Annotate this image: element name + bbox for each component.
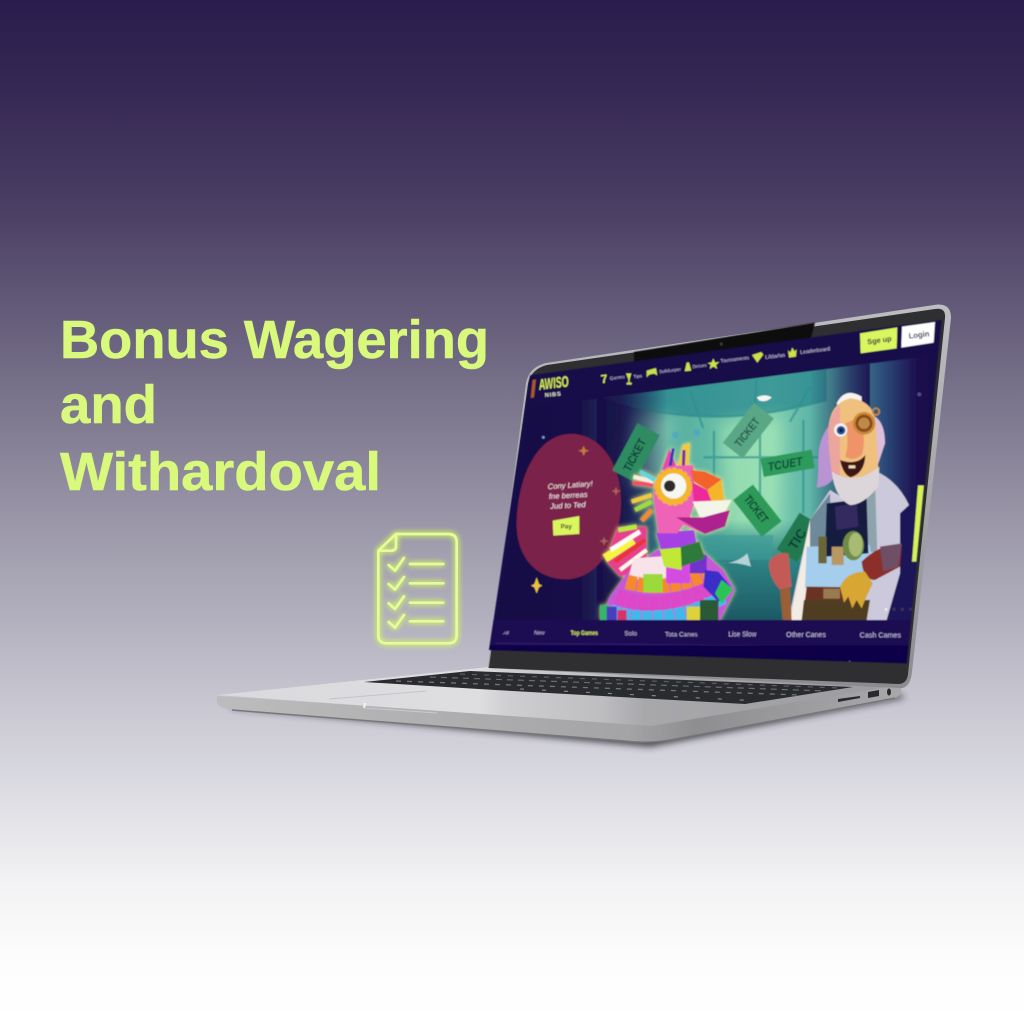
nav items: 7: [600, 372, 609, 386]
promo text: [547, 479, 594, 511]
trackpad edge: [329, 691, 426, 699]
side tab: [912, 485, 925, 562]
lab window frames: [603, 380, 827, 513]
eye petals: [655, 469, 691, 505]
nav items: Tournaments: [720, 355, 750, 365]
promo blob: [517, 434, 621, 579]
right edge fade: [812, 362, 870, 512]
beard: [832, 467, 879, 505]
scientist: [769, 393, 922, 620]
mouth: [840, 455, 865, 477]
lower page strip: Lavet wins: [826, 661, 858, 668]
floating tickets: TICKET: [741, 492, 772, 526]
lab dome: [606, 368, 827, 416]
game category tabs: Lise Slow: [728, 632, 757, 639]
green haze: [607, 413, 783, 533]
body fringe rows: [610, 573, 723, 618]
nav items: [600, 346, 831, 386]
base front edge: [217, 684, 901, 742]
laptop lid rim: [488, 305, 951, 688]
laptop: [217, 305, 951, 747]
sign up button: [860, 327, 897, 353]
ports: sd slot, usb-c, jack: [838, 688, 891, 702]
game category tabs: Tota Canes: [665, 631, 698, 638]
play button: [553, 516, 579, 536]
nav items: Lifdarlas: [765, 353, 786, 361]
laptop ground shadow: [232, 694, 905, 747]
login button: [901, 322, 935, 348]
eye and monocle: [834, 423, 847, 437]
face: [828, 398, 878, 487]
logo: AWISO: [537, 373, 570, 394]
game category tabs: Solo: [624, 630, 637, 637]
teeth: [693, 500, 732, 517]
keyboard: [364, 671, 853, 704]
llama pinata: [600, 443, 735, 620]
left edge fade: [596, 390, 664, 621]
lower page strip: [487, 645, 920, 668]
floating tickets: TICKET: [733, 416, 763, 450]
nav items: Tips: [633, 373, 643, 379]
body patches: [600, 555, 733, 620]
sparkles: [531, 392, 921, 593]
nav bar: [530, 321, 940, 399]
ears: [662, 443, 690, 470]
mane: [632, 472, 655, 521]
floating tickets: TICKET: [620, 436, 649, 474]
nav items: Games: [610, 374, 626, 381]
floor: [603, 523, 803, 621]
beads: [832, 547, 844, 565]
lower jaw: [676, 510, 730, 534]
title: [60, 310, 489, 502]
headphone: [843, 531, 864, 560]
nav items: Solidusper: [659, 367, 682, 374]
game category tabs: [487, 620, 920, 647]
carousel dots: [885, 608, 912, 611]
title: Bonus Wagering: [60, 310, 489, 370]
gold glove: [840, 572, 873, 608]
forearm and cuff: [862, 545, 902, 580]
base deck surface: [217, 667, 906, 726]
nav items: Deices: [692, 363, 708, 369]
sign up button: Sge up: [867, 334, 893, 346]
logo: [531, 373, 570, 399]
title: Withardoval: [60, 442, 381, 502]
coat: [788, 472, 918, 620]
game category tabs: New: [534, 631, 546, 637]
pinata body: [600, 547, 735, 620]
pink hand and cane: [780, 587, 792, 620]
icon: glowing checklist document: [378, 534, 457, 643]
floating tickets: [612, 403, 820, 562]
laptop base: [217, 667, 906, 742]
game category tabs: All: [502, 630, 510, 636]
camera notch: [634, 323, 815, 363]
neck rows: [656, 530, 705, 570]
floating tickets: TCUET: [767, 454, 805, 474]
display area: [487, 320, 943, 668]
belt and trousers: [805, 587, 855, 601]
wing: [605, 527, 647, 577]
game category tabs: Cash Cames: [860, 630, 901, 639]
logo: NIBS: [545, 392, 561, 399]
laptop lid bezel: [489, 309, 945, 684]
ceiling lamp: [757, 395, 772, 401]
promo text: fne berreas: [549, 490, 588, 501]
muzzle: [690, 470, 722, 490]
game category tabs: Top Games: [571, 630, 598, 637]
eye: [661, 473, 686, 499]
promo text: Cony Latiary!: [547, 479, 594, 491]
hero banner: [490, 350, 943, 623]
head: [654, 465, 705, 534]
play button: Pay: [561, 523, 572, 530]
login button: Login: [908, 329, 930, 341]
promo text: Jud to Ted: [549, 500, 587, 511]
hair: [817, 393, 885, 487]
floating tickets: TIC: [785, 526, 810, 552]
nav items: Leaderboard: [800, 346, 831, 356]
shirt: [805, 545, 873, 588]
game category tabs: Other Canes: [786, 630, 826, 639]
title: and: [60, 375, 157, 435]
screen: [487, 320, 943, 668]
